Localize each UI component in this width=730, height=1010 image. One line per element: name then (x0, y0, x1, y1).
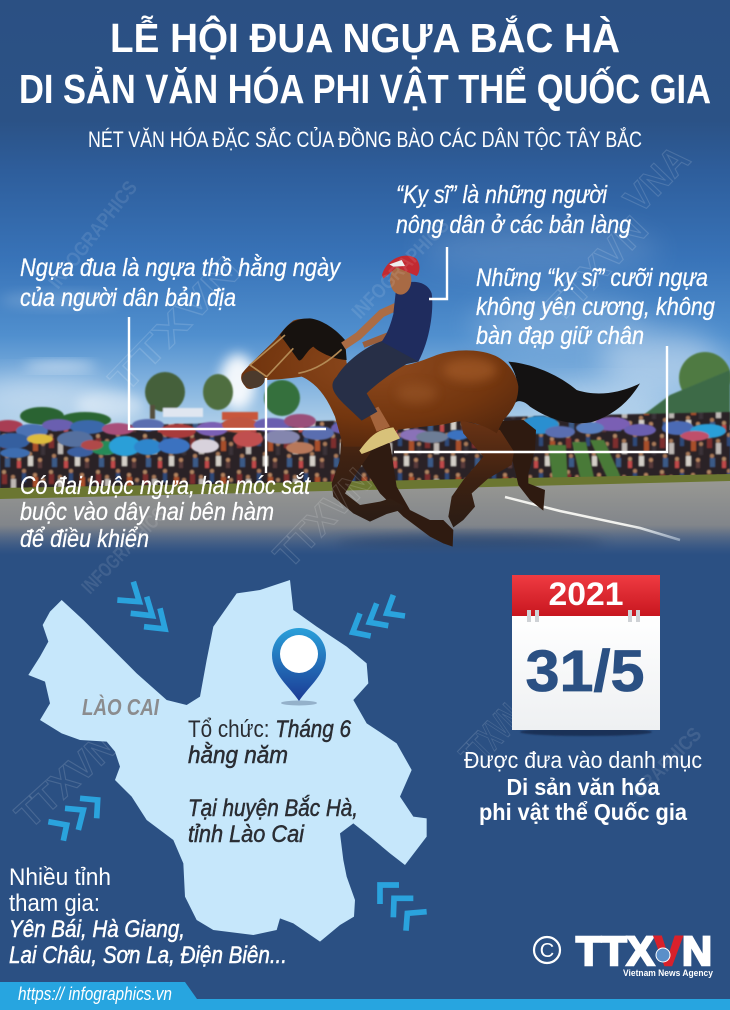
text: participating provinces: tham gia: (9, 890, 100, 917)
umbrellas (0, 414, 726, 458)
calendar header (512, 575, 660, 616)
year: 2021 (548, 576, 624, 612)
helmet (382, 256, 419, 279)
callout: harness: Có đai buộc ngựa, hai móc sắt (20, 471, 311, 500)
clouds (0, 224, 720, 419)
text: participating provinces: Nhiều tỉnh (9, 864, 111, 891)
callout: riders are farmers: “Kỵ sĩ” là những người (396, 181, 608, 209)
event time and place (188, 716, 358, 848)
title: LỄ HỘI ĐUA NGỰA BẮC HÀ (110, 15, 620, 61)
muzzle (242, 371, 265, 388)
text: heritage listing: Di sản văn hóa (506, 774, 660, 800)
crowd (0, 412, 730, 492)
event time and place: Tổ chức: Tháng 6 (188, 716, 352, 743)
event time and place: hằng năm (188, 742, 288, 769)
near front leg (327, 390, 404, 522)
callout: harness (20, 378, 311, 553)
text: heritage listing (464, 747, 702, 825)
footer bar (0, 982, 730, 1010)
trees and hill (20, 352, 730, 428)
road line (505, 497, 680, 540)
watermarks: TTXVN (266, 461, 380, 576)
body (241, 319, 518, 447)
bridle and reins (250, 335, 342, 377)
panel: race photo (0, 0, 730, 575)
map label: LÀO CAI (82, 693, 159, 720)
icon: chevrons lower right (380, 885, 427, 931)
callout: harness: buộc vào dây hai bên hàm (20, 498, 274, 526)
watermarks: TTXVN (8, 725, 125, 837)
watermarks: VNA (616, 138, 699, 221)
logo: TTXVN: C (540, 940, 554, 962)
text: heritage listing: phi vật thể Quốc gia (479, 799, 687, 825)
horse shadow (335, 536, 605, 554)
text: heritage listing: Được đưa vào danh mục (464, 747, 702, 773)
callout: riders are farmers: nông dân ở các bản làng (396, 211, 631, 239)
watermarks: TTXVN (452, 697, 531, 776)
watermarks: INFOGRAPHICS (348, 215, 454, 323)
icon: location pin (272, 628, 326, 706)
rider leg and shoe (368, 407, 390, 432)
icon: chevrons top right (353, 595, 405, 636)
text: participating provinces (9, 864, 287, 969)
callout: no saddle (394, 264, 715, 452)
callout: pack horses (20, 253, 341, 429)
sky (0, 0, 730, 430)
rider (332, 256, 432, 454)
shirt (382, 282, 432, 362)
callout: pack horses: của người dân bản địa (20, 284, 236, 312)
mane (280, 318, 347, 361)
watermarks: TTXVN (101, 250, 250, 401)
watermarks: INFOGRAPHICS (45, 177, 142, 293)
horse and rider (241, 256, 640, 547)
trousers (332, 340, 418, 421)
map: Lao Cai province (28, 580, 427, 942)
event time and place: Tại huyện Bắc Hà, (188, 795, 358, 822)
footer link: https:// infographics.vn (18, 984, 172, 1004)
callout: harness: để điều khiển (20, 525, 149, 553)
far hind leg (490, 420, 545, 511)
title (19, 15, 711, 112)
guards (548, 440, 624, 488)
body highlights (443, 358, 497, 382)
tail (508, 362, 640, 423)
event time and place: tỉnh Lào Cai (188, 821, 305, 848)
arm (343, 305, 400, 346)
icon: chevrons left (48, 798, 98, 841)
calendar rings (527, 610, 640, 622)
grass strip (0, 474, 730, 500)
callout: no saddle: bàn đạp giữ chân (476, 322, 644, 350)
wordmark: TTXVN (576, 928, 712, 974)
near hind leg (448, 420, 514, 527)
callout: pack horses: Ngựa đua là ngựa thồ hằng ngày (20, 253, 341, 282)
watermarks: INFOGRAPHICS (78, 504, 170, 598)
photo fade (0, 525, 730, 555)
calendar page (512, 616, 660, 730)
agency name: Vietnam News Agency (623, 968, 713, 978)
calendar (512, 575, 660, 736)
copyright mark (534, 937, 560, 963)
text: participating provinces: Yên Bái, Hà Giang, (9, 916, 185, 943)
road (0, 481, 730, 560)
icon: chevrons top left (117, 582, 165, 629)
far front leg (357, 437, 453, 547)
watermarks (8, 138, 706, 837)
text: participating provinces: Lai Châu, Sơn La, Điện Biên... (9, 942, 287, 969)
watermarks: TTXVN (536, 209, 657, 331)
globe (656, 948, 670, 962)
logo: TTXVN (534, 928, 713, 978)
callout: riders are farmers (396, 181, 631, 299)
back arm (363, 333, 393, 345)
date: 31/5 (526, 639, 644, 704)
head (390, 265, 411, 295)
watermarks: GRAPHICS (628, 723, 706, 803)
